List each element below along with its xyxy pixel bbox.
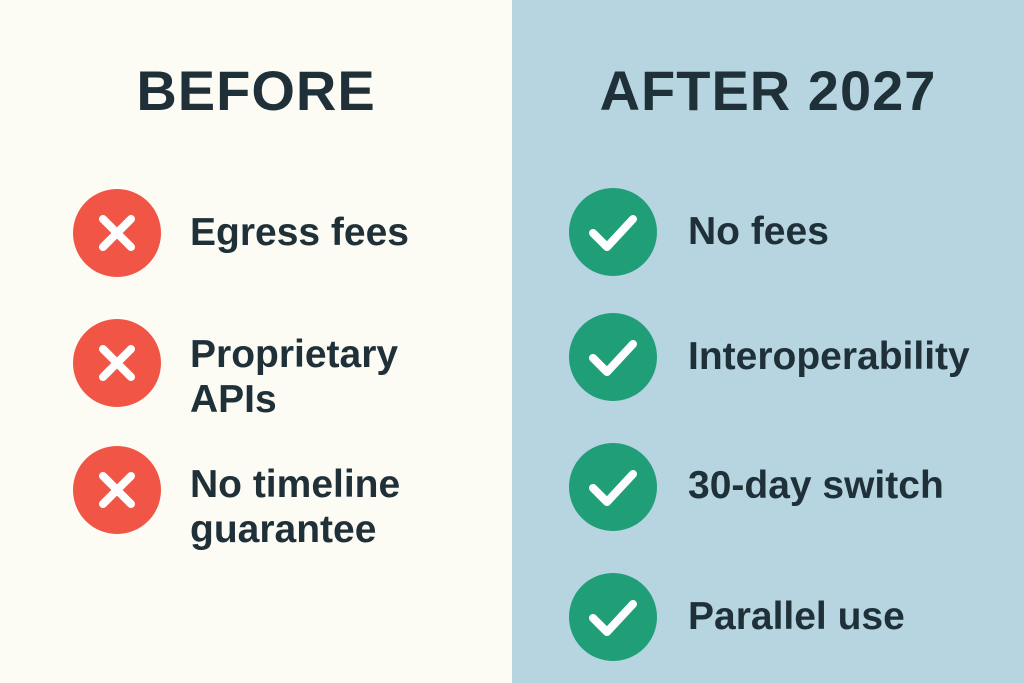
icon: x 3: [73, 446, 161, 534]
panel: after: [512, 0, 1024, 683]
text: proprietary apis: Proprietary: [190, 333, 398, 376]
text: parallel use: Parallel use: [688, 595, 905, 638]
text: no fees: No fees: [688, 210, 829, 253]
text: egress fees: Egress fees: [190, 211, 409, 254]
icon: x 1: [73, 189, 161, 277]
icon: check 1: [569, 188, 657, 276]
text: no timeline guarantee: guarantee: [190, 508, 376, 551]
title: before: BEFORE: [136, 59, 376, 122]
icon: check 4: [569, 573, 657, 661]
panel: before: [0, 0, 512, 683]
text: no timeline guarantee: [190, 463, 400, 551]
text: no timeline guarantee: No timeline: [190, 463, 400, 506]
icon: check 3: [569, 443, 657, 531]
text: 30-day switch: 30-day switch: [688, 464, 944, 507]
text: proprietary apis: APIs: [190, 378, 277, 421]
icon: x 2: [73, 319, 161, 407]
title: after 2027: AFTER 2027: [600, 59, 936, 122]
icon: check 2: [569, 313, 657, 401]
text: proprietary apis: [190, 333, 398, 421]
text: interoperability: Interoperability: [688, 335, 970, 378]
